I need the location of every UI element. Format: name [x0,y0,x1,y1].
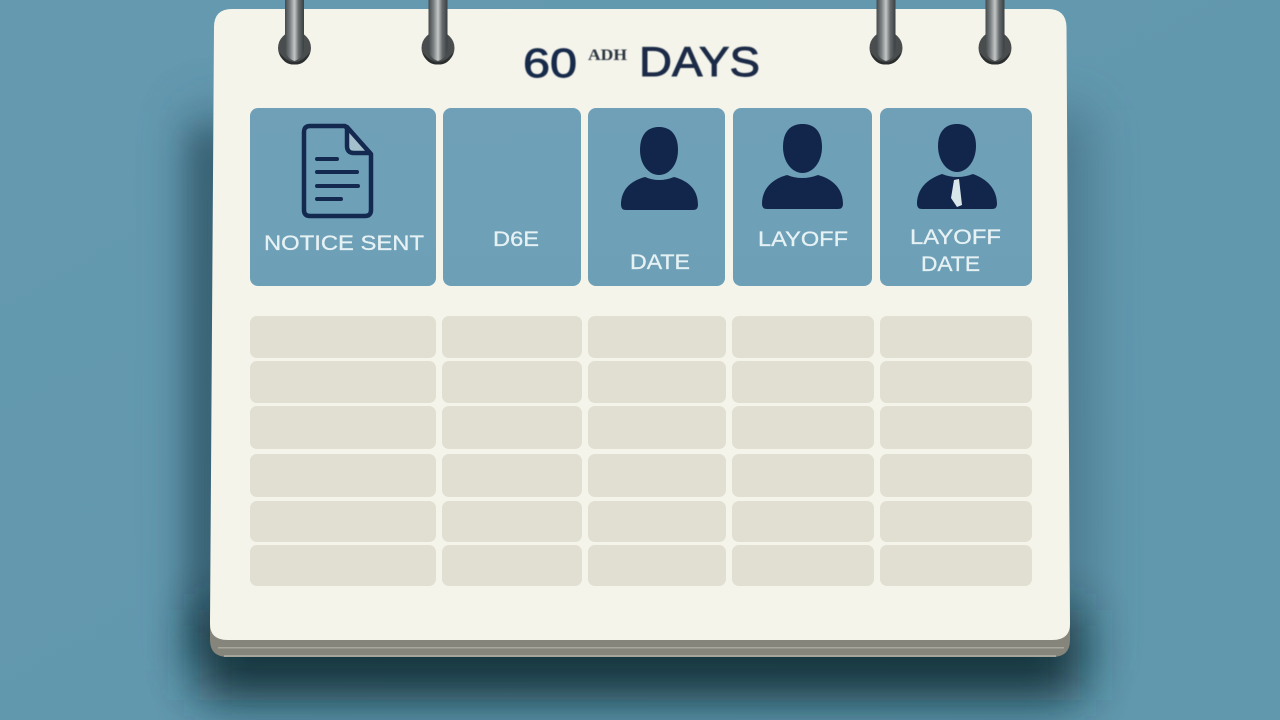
row 4 [250,454,1032,497]
header cell: layoff [733,108,872,286]
header cell: layoff date: LAYOFF [910,226,1001,249]
binder rings [278,0,1012,65]
row 5 [250,501,1032,542]
header row [250,108,1032,286]
header cell: notice sent: NOTICE SENT [264,232,424,255]
calendar pad [210,0,1070,657]
icon: person [621,127,698,210]
page stack edge [210,625,1070,657]
row 1 [250,316,1032,358]
ring 3 [870,0,902,65]
title: DAYS [639,38,760,85]
header cell: d6e: D6E [493,228,539,251]
header cell: layoff: LAYOFF [758,228,848,251]
header cell: notice sent [250,108,436,286]
title: 60 [523,40,577,86]
ring 1 [278,0,311,65]
header cell: date [588,108,725,286]
empty table grid [250,316,1032,586]
row 3 [250,406,1032,449]
header cell: layoff date: DATE [921,253,980,276]
header cell: d6e [443,108,581,286]
header cell: date: DATE [630,251,690,274]
page drop shadow [190,110,1090,700]
title [523,38,760,86]
icon: document [304,126,371,216]
calendar page [210,9,1070,640]
header cell: layoff date [880,108,1032,286]
row 2 [250,361,1032,403]
ring 2 [422,0,454,65]
title: ADH [588,47,628,64]
icon: person [762,124,843,209]
row 6 [250,545,1032,586]
ring 4 [978,0,1012,65]
icon: person with tie [917,124,997,209]
